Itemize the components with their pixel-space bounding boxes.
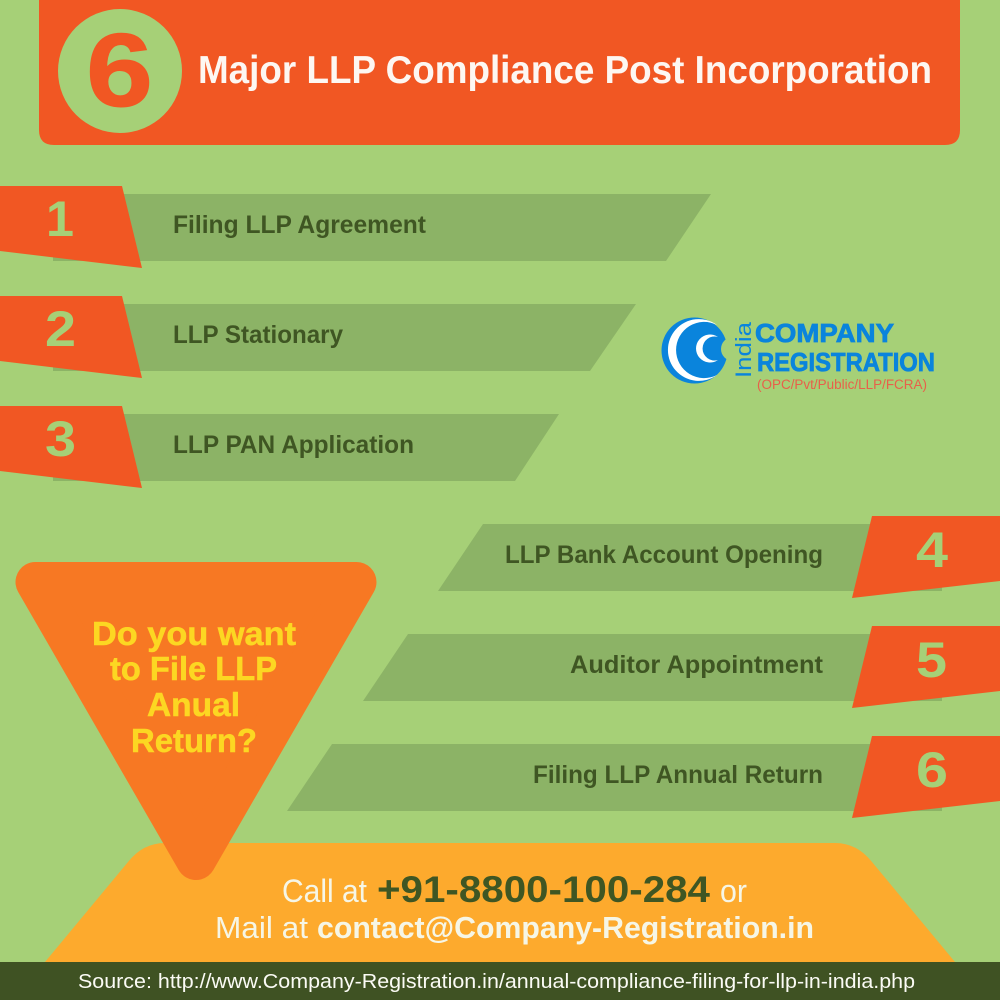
callout text: Do you want <box>92 615 296 652</box>
step 1 <box>0 186 711 268</box>
step 3: 3 <box>45 411 76 467</box>
title: Major LLP Compliance Post Incorporation <box>198 49 932 92</box>
logo word: Registration: REGISTRATION <box>757 347 935 377</box>
logo tagline: (OPC/Pvt/Public/LLP/FCRA) <box>757 377 927 392</box>
step 6: Filing LLP Annual Return <box>533 761 823 789</box>
logo word: India: India <box>731 321 756 378</box>
contact mail line: Mail at <box>215 910 308 945</box>
contact mail line: contact@Company-Registration.in <box>317 910 814 945</box>
step 2: LLP Stationary <box>173 321 343 349</box>
callout triangle <box>36 582 356 860</box>
step 5: Auditor Appointment <box>570 651 824 679</box>
step 1: Filing LLP Agreement <box>173 211 427 239</box>
step 6: 6 <box>916 742 948 798</box>
callout text: Return? <box>131 722 257 759</box>
step 3: LLP PAN Application <box>173 431 414 459</box>
step 4 <box>438 516 1000 598</box>
icon: crescent logo mark <box>662 318 745 384</box>
step 2 <box>0 296 636 378</box>
step 4: LLP Bank Account Opening <box>505 541 823 569</box>
contact panel <box>45 843 955 962</box>
step 4: 4 <box>916 522 948 578</box>
logo word: Company: COMPANY <box>755 318 894 348</box>
contact phone line: Call at <box>282 873 367 909</box>
logo: India Company Registration <box>662 318 935 392</box>
callout text: to File LLP <box>110 650 277 687</box>
contact phone line: or <box>720 873 747 909</box>
icon: big number six badge: 6 <box>86 13 153 129</box>
step 6 <box>287 736 1000 818</box>
step 1: 1 <box>46 191 74 247</box>
step 5 <box>363 626 1000 708</box>
contact phone line <box>282 869 747 910</box>
source footer <box>0 962 1000 1000</box>
step 5: 5 <box>916 632 947 688</box>
step 2: 2 <box>45 301 76 357</box>
icon: big number six badge <box>58 9 182 133</box>
contact phone line: +91-8800-100-284 <box>377 869 710 910</box>
source footer: Source: http://www.Company-Registration.in/annual-compliance-filing-for-llp-in-india.php <box>78 970 915 993</box>
callout text: Anual <box>147 686 240 723</box>
callout text <box>92 615 296 759</box>
step 3 <box>0 406 559 488</box>
header panel <box>39 0 960 145</box>
